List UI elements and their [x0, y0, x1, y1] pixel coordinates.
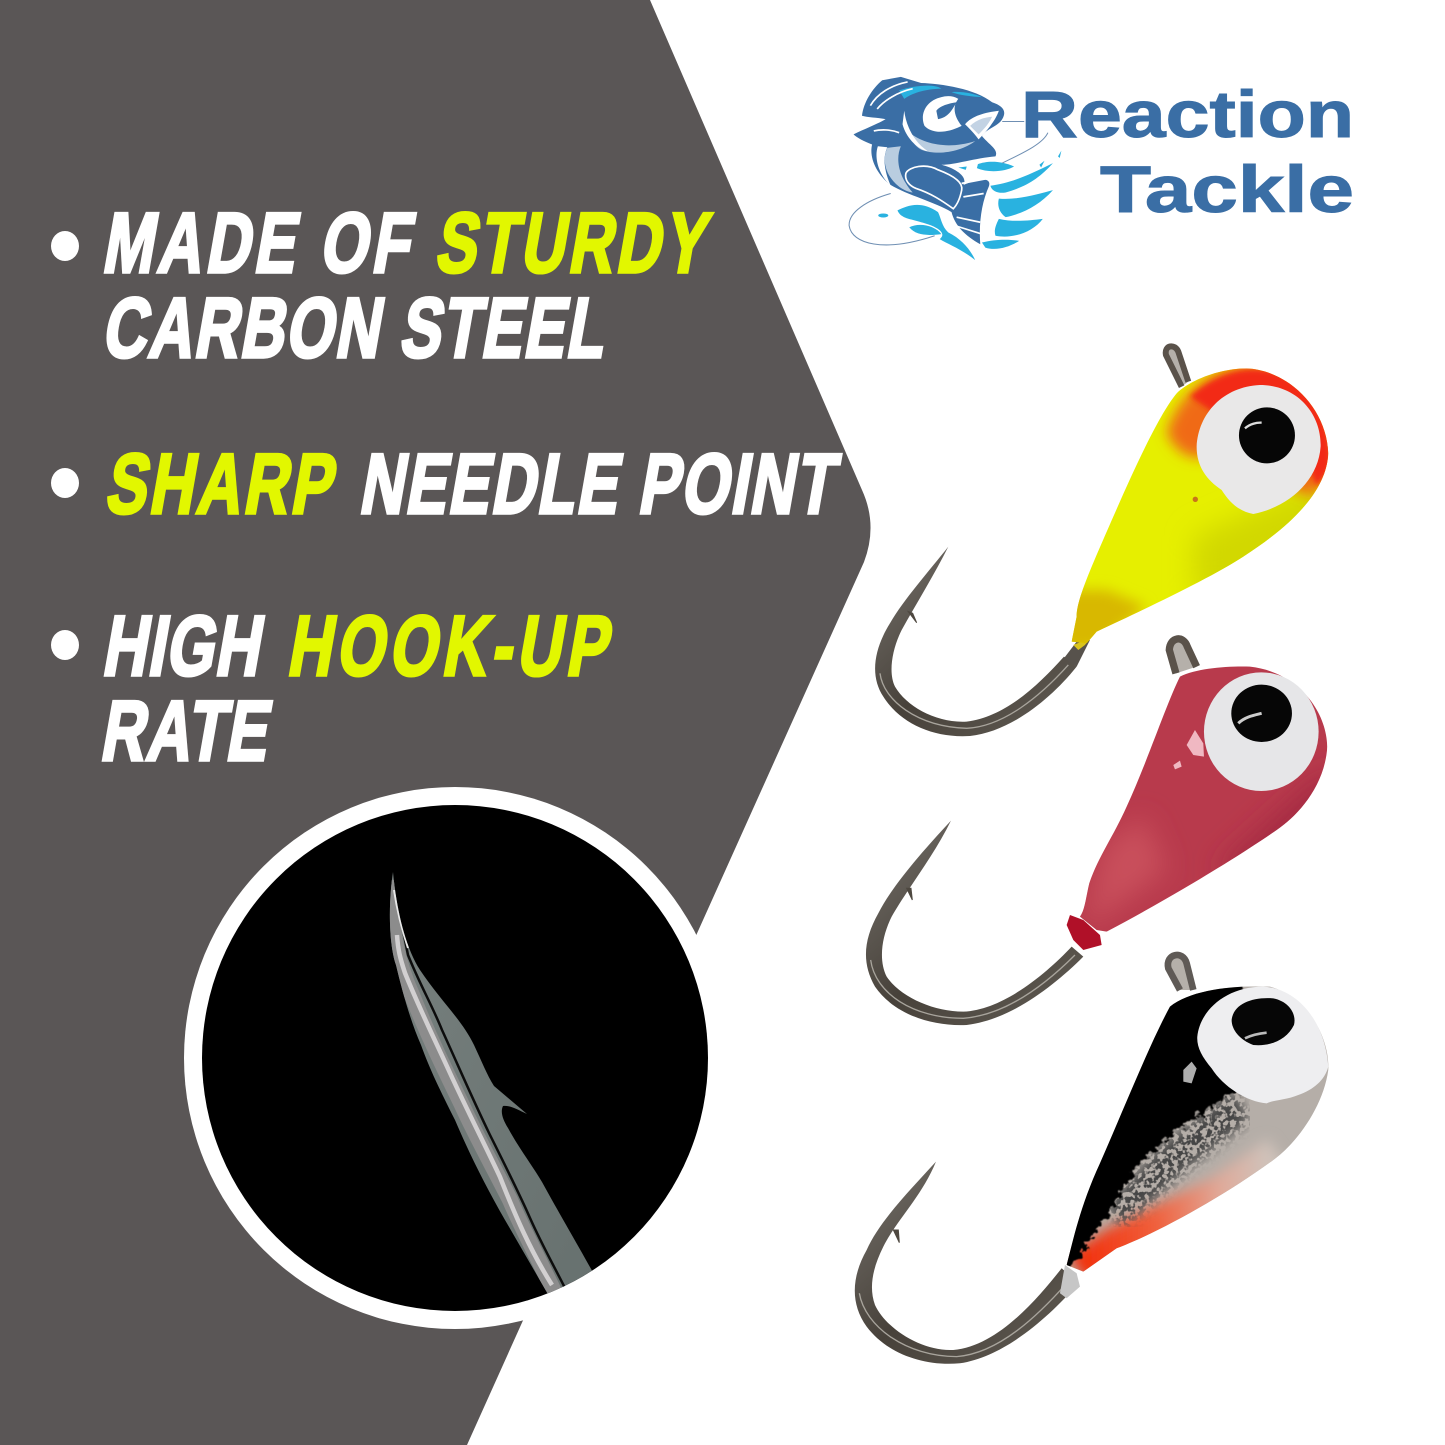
hook	[855, 1162, 1080, 1364]
jig 2: pink	[866, 639, 1333, 1025]
chipped paint	[1183, 1062, 1197, 1083]
text: high hook-up rate	[96, 598, 619, 778]
text: sharp needle point: NEEDLE POINT	[355, 436, 845, 531]
text: sharp needle point	[101, 436, 845, 531]
eyelet	[1166, 346, 1188, 387]
eye	[1197, 987, 1328, 1103]
text: high hook-up rate: HOOK-UP	[283, 598, 619, 693]
hook	[875, 547, 1090, 736]
panel: dark background shape	[0, 0, 871, 1445]
text: high hook-up rate: HIGH	[98, 598, 272, 693]
callout: hook point close-up	[184, 787, 726, 1329]
neck ring	[1067, 915, 1102, 950]
logo: Reaction Tackle	[849, 77, 1354, 260]
bullet 1	[51, 231, 79, 261]
text: made of sturdy carbon steel: MADE OF	[98, 195, 421, 290]
logo text: Tackle: Tackle	[1100, 152, 1354, 226]
icon: leaping fish	[849, 77, 1061, 260]
text: made of sturdy carbon steel: STURDY	[431, 195, 717, 290]
feature list	[51, 195, 845, 778]
eye	[1197, 385, 1321, 514]
text: made of sturdy carbon steel	[98, 195, 717, 375]
hook	[866, 821, 1083, 1025]
bullet 2	[51, 468, 79, 498]
bullet 3	[51, 630, 79, 660]
eye	[1204, 672, 1319, 791]
logo text: Reaction: Reaction	[1021, 77, 1354, 151]
body	[1066, 986, 1328, 1272]
body	[1072, 368, 1328, 644]
text: made of sturdy carbon steel: CARBON STEEL	[98, 280, 616, 375]
jig 1: yellow and red	[875, 346, 1343, 736]
text: sharp needle point: SHARP	[101, 436, 344, 531]
eyelet	[1168, 955, 1193, 990]
eyelet	[1169, 639, 1197, 673]
body	[1080, 666, 1328, 932]
text: high hook-up rate: RATE	[96, 683, 279, 778]
close-up hook barb	[390, 872, 600, 1315]
chipped paint	[1173, 730, 1204, 769]
jig 3: black, silver and orange	[855, 955, 1337, 1364]
splash streaks	[878, 151, 1061, 260]
